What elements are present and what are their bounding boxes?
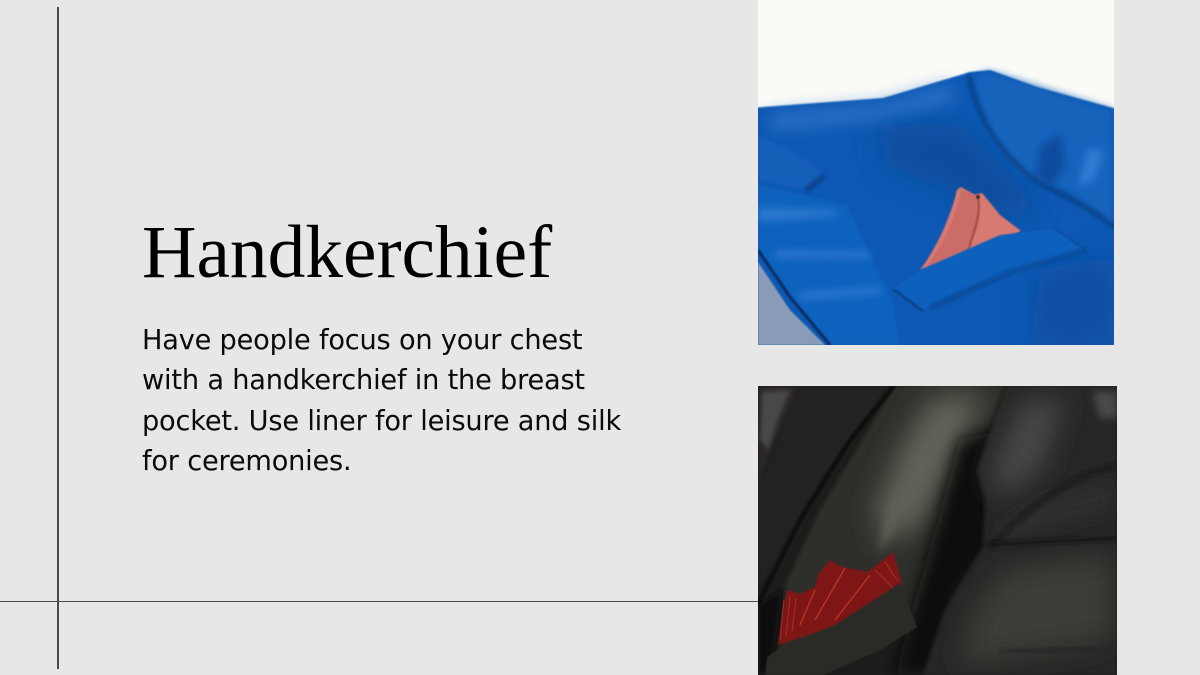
pocket flap [765, 583, 917, 675]
seam line [758, 386, 894, 605]
body text: with a handkerchief in the breast [142, 365, 585, 396]
body text [142, 325, 622, 477]
body text: Have people focus on your chest [142, 325, 582, 356]
dark lapel [758, 386, 888, 590]
pocket square [920, 187, 1021, 270]
black shadow by lapel base [758, 590, 782, 675]
floral tie [758, 386, 800, 490]
red pocket square [778, 552, 902, 645]
grey shirt [758, 262, 825, 345]
lower lapel [758, 185, 900, 345]
body text: for ceremonies. [142, 446, 351, 477]
dark shadow [895, 430, 1000, 675]
title: Handkerchief [142, 211, 552, 294]
pocket welt [892, 229, 1086, 311]
sleeve [923, 386, 1117, 675]
photo: blue jacket with pink pocket square [758, 0, 1114, 345]
photo: dark grey suit with red pocket square [758, 386, 1117, 675]
jacket body [750, 70, 1120, 350]
chest cloth [780, 386, 1005, 660]
shoulder fold [974, 72, 1114, 225]
lower right tone [1030, 255, 1114, 345]
body text: pocket. Use liner for leisure and silk [142, 406, 621, 437]
upper lapel [758, 135, 824, 190]
